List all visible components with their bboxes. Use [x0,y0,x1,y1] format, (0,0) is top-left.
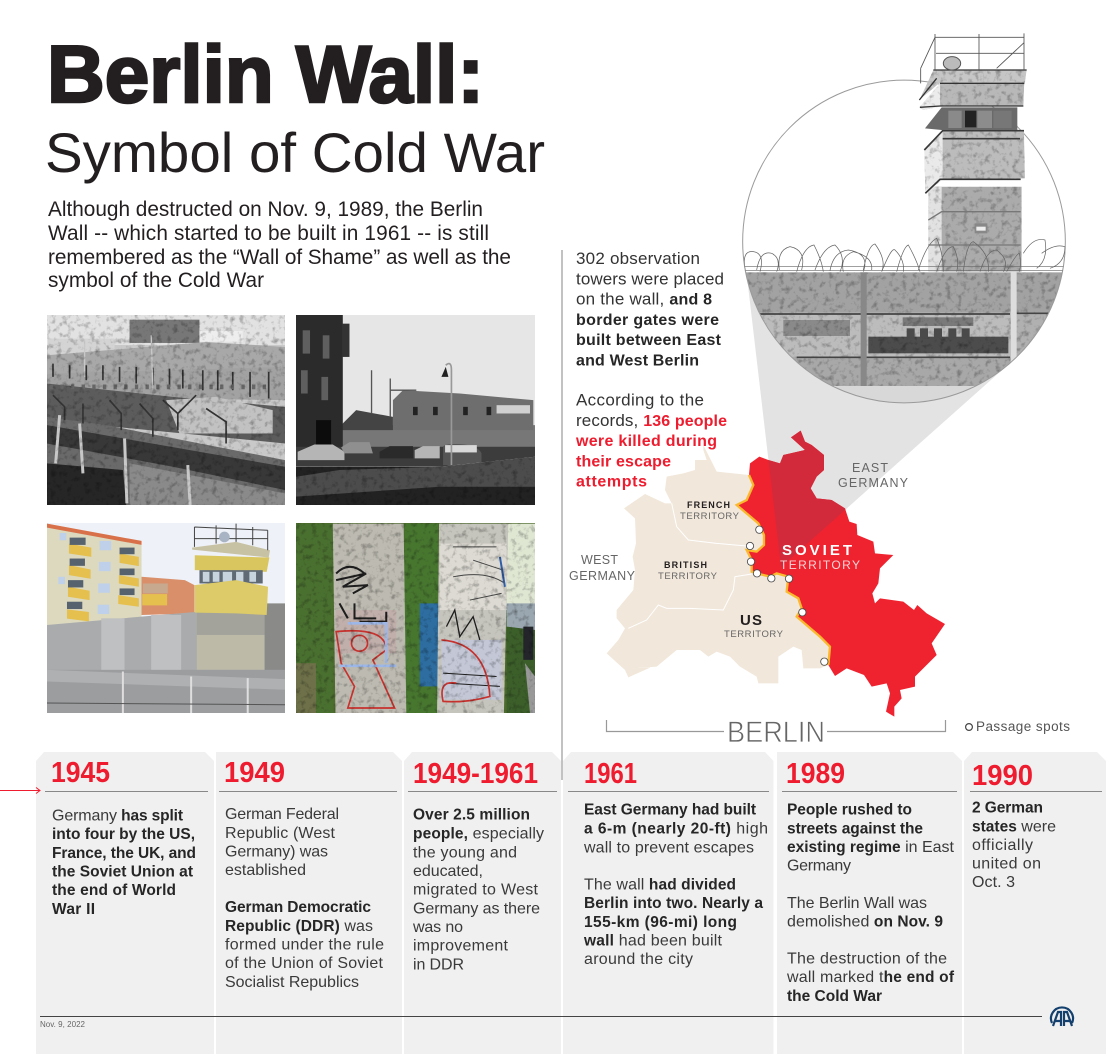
observation towers text: on the wall, and 8 [576,290,712,308]
map labels: TERRITORY [724,629,784,640]
timeline panel 1949: 1949 [224,757,285,789]
timeline panel 1990: states were [972,818,1056,836]
map of divided Berlin [606,430,945,717]
Berlin scale bracket: BERLIN [727,716,825,749]
map labels: TERRITORY [780,558,860,572]
timeline panel 1961: Berlin into two. Nearly a [584,895,763,912]
intro text block: symbol of the Cold War [48,269,264,292]
observation towers text [575,249,727,490]
timeline panel 1949-1961: Over 2.5 million [413,806,530,824]
Soviet territory [737,431,945,717]
timeline panel 1945: France, the UK, and [52,845,196,862]
timeline panel 1949: established [225,862,306,879]
map labels: WEST [581,553,618,567]
map labels: SOVIET [782,542,852,559]
footer line [40,1016,1042,1018]
intro text block [48,198,511,292]
circular inset: watchtower and wall [740,33,1070,409]
map labels: GERMANY [838,476,909,490]
photo: coloured watchtower and apartments [47,523,285,713]
timeline panel 1961: 1961 [584,758,637,790]
map labels: TERRITORY [658,571,718,582]
observation towers text: and West Berlin [576,352,699,370]
timeline panel 1949: formed under the rule [225,936,384,954]
timeline panel 1945: Germany has split [52,808,183,824]
timeline panel 1961: wall had been built [583,932,723,950]
timeline panel 1989: 1989 [786,758,845,790]
timeline panel 1949-1961: in DDR [413,956,464,974]
map labels: TERRITORY [680,511,740,522]
observation towers text: border gates were [576,312,719,329]
map labels: US [740,612,762,629]
timeline panel 1961: East Germany had built [584,802,756,818]
West Berlin area [607,445,830,683]
timeline panel 1949-1961: Germany as there [413,900,540,918]
timeline panel 1990 [964,752,1106,1054]
timeline panel 1990: 1990 [972,760,1033,792]
timeline panel 1989: the Cold War [787,988,882,1005]
intro text block: remembered as the “Wall of Shame” as well as the [48,246,511,269]
observation towers text: built between East [576,332,722,349]
timeline panel 1945 [36,752,214,1054]
icon: AA logo [1051,1007,1073,1026]
timeline panel 1990: united on [972,856,1041,872]
timeline panel 1949-1961 [404,752,561,1054]
observation towers text: records, 136 people [576,411,727,430]
timeline panel 1949: Socialist Republics [225,974,359,991]
timeline panel 1990: 2 German [972,800,1043,816]
date: Nov. 9, 2022 [40,1020,86,1029]
razor wire [743,238,1065,272]
timeline panel 1990: officially [972,837,1033,854]
timeline panel 1961: 155-km (96-mi) long [584,914,737,931]
timeline panel 1990: Oct. 3 [972,874,1015,891]
observation towers text: towers were placed [576,270,724,288]
observation towers text: 302 observation [576,249,700,268]
timeline panel 1989: Germany [787,858,851,874]
red timeline arrow [0,788,40,794]
photo: wall and fences black and white [47,315,285,505]
timeline panel 1989: The destruction of the [787,950,947,968]
timeline panel 1989: demolished on Nov. 9 [787,914,943,930]
intro text block: Wall -- which started to be built in 1961 -- is still [48,222,489,245]
timeline panel 1949: Republic (DDR) was [225,918,373,935]
photo: graffiti wall segments [296,523,535,713]
timeline panel 1949-1961: migrated to West [413,882,539,898]
timeline panel 1949-1961: people, especially [413,826,544,842]
observation towers text: According to the [576,390,704,410]
map labels: BRITISH [664,560,707,570]
timeline panel 1961: wall to prevent escapes [583,840,754,856]
vertical divider line [561,250,563,780]
observation towers text: attempts [576,474,647,490]
map labels: FRENCH [687,500,730,510]
timeline panel 1945: War II [52,901,95,918]
timeline panel 1989: wall marked the end of [786,969,955,986]
subtitle: Symbol of Cold War: Symbol of Cold War [45,121,545,184]
title: Berlin Wall: Berlin Wall: [47,30,484,120]
Berlin scale bracket [606,716,946,749]
timeline panel 1989: The Berlin Wall was [787,895,927,912]
observation towers text: their escape [576,454,671,470]
legend: passage spots: Passage spots [976,719,1070,734]
passage spot markers [746,526,828,665]
timeline panel 1961: around the city [584,951,693,968]
timeline panel 1949: German Democratic [225,899,371,916]
timeline panel 1989: streets against the [787,820,923,838]
magnifier cone [747,277,1010,567]
timeline panel 1949: German Federal [225,806,339,823]
intro text block: Although destructed on Nov. 9, 1989, the Berlin [48,198,483,221]
timeline panel 1949 [216,752,402,1054]
map labels [569,461,909,640]
timeline panel 1949-1961: educated, [413,863,483,880]
timeline panel 1949: Republic (West [225,825,336,842]
timeline panel 1961: The wall had divided [584,876,736,894]
map labels: EAST [852,461,888,475]
timeline panel 1949-1961: the young and [413,844,517,862]
timeline panel 1989 [777,752,962,1054]
timeline panel 1961 [563,752,774,1054]
timeline panel 1949: Germany) was [225,844,328,860]
timeline panel 1945: 1945 [51,757,110,789]
map labels: GERMANY [569,569,636,583]
timeline panel 1949-1961: was no [412,919,463,936]
timeline panel 1949-1961: 1949-1961 [413,758,538,790]
watchtower [919,33,1027,272]
photo: ruined buildings and parked cars [296,315,535,505]
observation towers text: were killed during [575,433,717,450]
timeline panel 1949: of the Union of Soviet [225,955,384,972]
timeline panel 1945: into four by the US, [52,826,195,843]
timeline panel 1989: existing regime in East [787,839,955,856]
timeline panel 1989: People rushed to [787,802,912,818]
timeline panel 1961: a 6-m (nearly 20-ft) high [584,820,768,838]
timeline panel 1945: the end of World [52,882,176,899]
timeline panel 1945: the Soviet Union at [52,864,193,880]
timeline panel 1949-1961: improvement [413,938,509,954]
